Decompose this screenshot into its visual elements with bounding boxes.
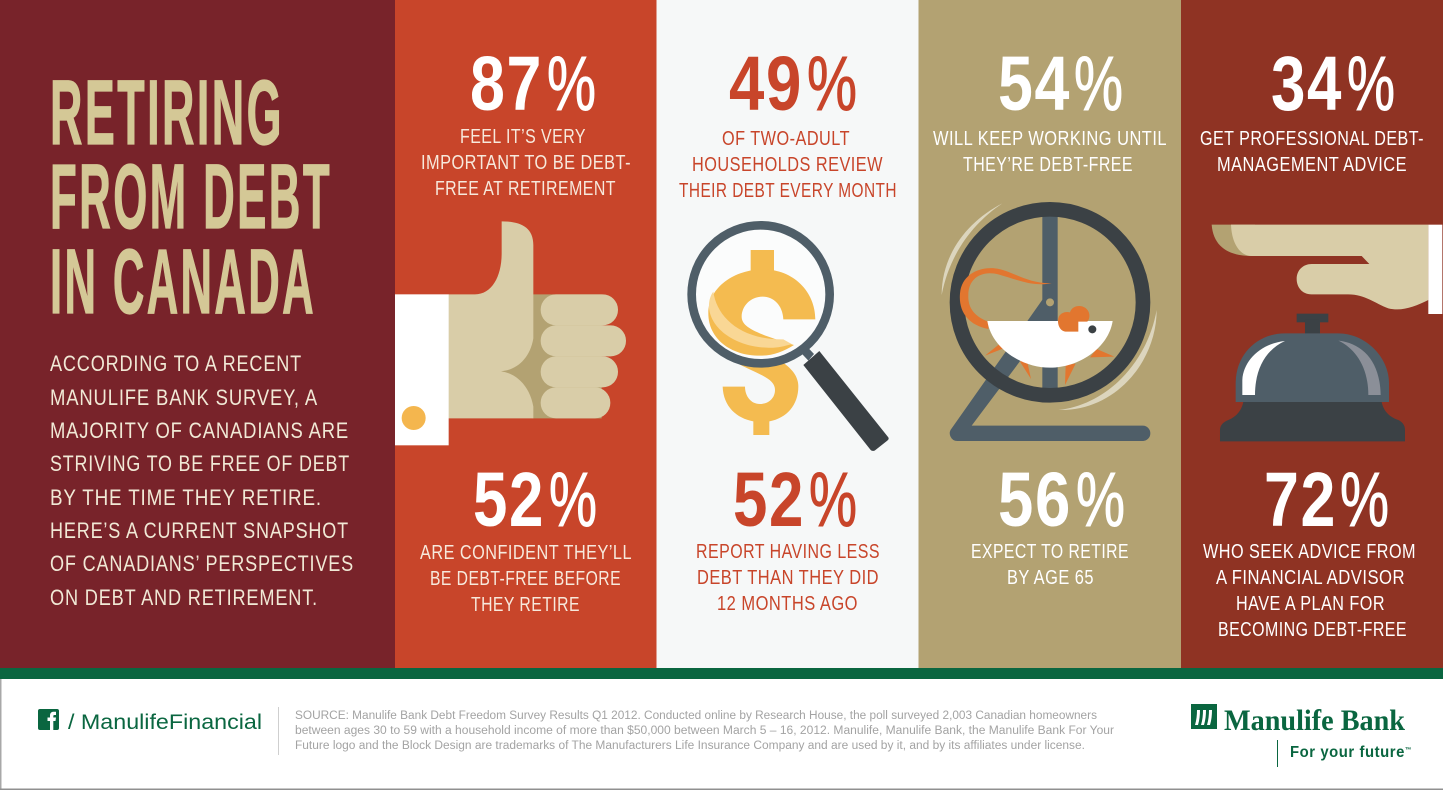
stat 56%: % [1076,457,1125,543]
intro paragraph: ACCORDING TO A RECENT [50,351,302,376]
caption 56% [971,540,1129,589]
caption 72%: A FINANCIAL ADVISOR [1216,566,1405,589]
caption 52% confident: ARE CONFIDENT THEY’LL [420,541,632,564]
stat 52% less debt: % [809,457,857,543]
handle text: / ManulifeFinancial [68,710,262,734]
icon: block design [1191,704,1217,729]
stat 52% less debt: 52 [733,457,805,543]
title [50,62,332,333]
caption 52% less debt: DEBT THAN THEY DID [697,566,879,589]
icon: Facebook [38,709,59,730]
intro paragraph: MAJORITY OF CANADIANS ARE [50,418,349,443]
intro paragraph: MANULIFE BANK SURVEY, A [50,385,318,410]
wordmark: Manulife Bank [1224,704,1405,737]
intro paragraph: STRIVING TO BE FREE OF DEBT [50,451,350,476]
intro paragraph [50,351,354,610]
footer: source note: between ages 30 to 59 with a household income of more than $50,000 between March 5 – 16, 2012. Manulife, Manulife Bank, the Manulife Bank For Your [295,725,1114,737]
caption 52% confident: BE DEBT-FREE BEFORE [430,567,621,590]
intro paragraph: ON DEBT AND RETIREMENT. [50,585,318,610]
caption 52% less debt: REPORT HAVING LESS [696,540,880,563]
panel: debt-free importance [395,0,656,668]
footer: Facebook handle [38,709,262,734]
caption 87%: FREE AT RETIREMENT [435,177,616,200]
tagline: ™ [1405,747,1412,754]
footer: Manulife Bank logo [1191,704,1412,767]
stat 54%: 54 [998,41,1071,127]
stat 72%: % [1340,457,1389,543]
footer: source note: Future logo and the Block Design are trademarks of The Manufacturers Life Insurance Company and are used by it, and by its affiliates under license. [295,740,1085,752]
caption 54% [933,127,1167,176]
icon: mouse on running wheel [942,203,1157,441]
icon: thumbs up hand [395,221,626,445]
caption 54%: WILL KEEP WORKING UNTIL [933,127,1167,150]
panel: monthly debt review [656,0,918,668]
caption 49%: THEIR DEBT EVERY MONTH [679,179,897,202]
panel: keep working [918,0,1181,668]
stat 34%: 34 [1271,41,1343,127]
panel: intro [0,0,395,668]
caption 87%: FEEL IT’S VERY [460,125,586,148]
stat 87%: 87 [470,41,543,127]
stat 52% confident: 52 [473,457,545,543]
caption 52% confident: THEY RETIRE [471,593,580,616]
caption 87%: IMPORTANT TO BE DEBT- [421,151,631,174]
icon: hand ringing service bell [1212,225,1442,441]
stat 87%: % [547,41,596,127]
stat 34%: % [1347,41,1395,127]
stat 49%: 49 [729,41,803,127]
caption 49%: HOUSEHOLDS REVIEW [692,153,883,176]
caption 52% confident [420,541,632,616]
caption 52% less debt: 12 MONTHS AGO [717,592,858,615]
stat 49%: % [807,41,857,127]
title: RETIRING [50,62,284,164]
caption 87% [421,125,631,200]
caption 56%: EXPECT TO RETIRE [971,540,1129,563]
footer: source note: SOURCE: Manulife Bank Debt Freedom Survey Results Q1 2012. Conducted online by Research House, the poll surveyed 2,003 Canadian homeowners [295,710,1097,722]
caption 72%: HAVE A PLAN FOR [1236,592,1385,615]
caption 52% less debt [696,540,880,615]
intro paragraph: OF CANADIANS’ PERSPECTIVES [50,551,354,576]
panel: professional advice [1181,0,1443,668]
caption 49% [679,127,897,202]
tagline: For your future [1290,744,1414,761]
caption 34% [1200,127,1424,176]
panel: intro: FROM DEBT [50,146,332,248]
caption 56%: BY AGE 65 [1007,566,1094,589]
caption 54%: THEY’RE DEBT-FREE [963,153,1133,176]
icon: magnifying glass over dollar [692,225,889,451]
stat 72%: 72 [1264,457,1337,543]
stat 54%: % [1074,41,1123,127]
intro paragraph: BY THE TIME THEY RETIRE. [50,485,322,510]
stat 52% confident: % [549,457,597,543]
intro paragraph: HERE’S A CURRENT SNAPSHOT [50,518,349,543]
footer: source note [295,710,1114,752]
caption 72% [1203,540,1416,641]
stat 56%: 56 [998,457,1072,543]
caption 49%: OF TWO-ADULT [722,127,850,150]
title: IN CANADA [50,231,316,333]
